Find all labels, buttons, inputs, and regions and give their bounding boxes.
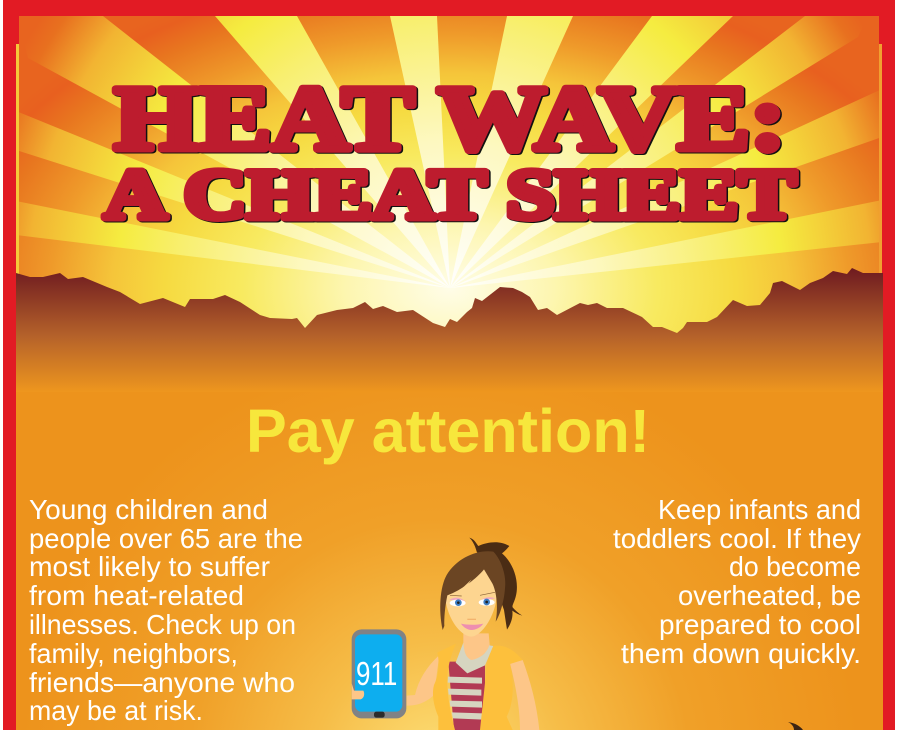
title text: HEAT WAVE:: [114, 67, 786, 169]
hand fingers: [352, 683, 364, 699]
text block: right: toddlers cool. If they: [613, 523, 861, 554]
text block: right: them down quickly.: [621, 638, 861, 669]
back hair: [469, 538, 522, 630]
heading: pay attention: Pay attention!: [246, 397, 650, 465]
text block: left: from heat-related: [29, 580, 244, 611]
title shadow: [106, 68, 798, 235]
title shadow: A CHEAT SHEET: [106, 157, 798, 235]
illustration: woman holding phone: [352, 538, 539, 730]
hair highlight: [456, 579, 472, 594]
text block: left: illnesses. Check up on: [29, 609, 296, 640]
text block: left: family, neighbors,: [29, 638, 238, 669]
shirt: [448, 662, 485, 730]
phone number: 911: [356, 656, 397, 693]
arm right: [510, 660, 539, 730]
text block: right: do become: [729, 551, 861, 582]
neck: [463, 633, 490, 667]
phone: [352, 629, 406, 718]
text block: left: friends—anyone who: [29, 667, 295, 698]
title: [104, 67, 798, 235]
phone home button: [374, 712, 385, 718]
text block: right: Keep infants and: [658, 494, 861, 525]
lips: [461, 624, 483, 630]
panel: sunburst sky: [16, 16, 883, 346]
side strips: [16, 44, 19, 274]
hair front: [440, 551, 505, 630]
nose: [467, 617, 476, 621]
arm left: [407, 655, 439, 706]
text block: left: people over 65 are the: [29, 523, 303, 554]
vest left: [433, 644, 456, 730]
phone screen: [355, 634, 402, 712]
panel: orange ground background: [16, 320, 883, 730]
sun rays: [16, 16, 882, 288]
title text: A CHEAT SHEET: [104, 156, 796, 234]
text block: left: [29, 494, 303, 726]
eyebrows: [450, 592, 495, 596]
illustration: partial figure at lower right: [788, 722, 803, 730]
text block: right: [613, 494, 861, 669]
text block: right: prepared to cool: [659, 609, 861, 640]
text block: left: most likely to suffer: [29, 551, 270, 582]
shirt stripes: [448, 677, 483, 720]
mountain silhouette: [16, 268, 883, 392]
eyes: [449, 598, 466, 602]
face: [445, 569, 497, 637]
text block: left: Young children and: [29, 494, 268, 525]
vest right: [480, 646, 523, 730]
shirt collar: [456, 643, 493, 673]
title text: [104, 67, 796, 234]
text block: left: may be at risk.: [29, 695, 203, 726]
text block: right: overheated, be: [678, 580, 861, 611]
title shadow: HEAT WAVE:: [116, 68, 788, 170]
